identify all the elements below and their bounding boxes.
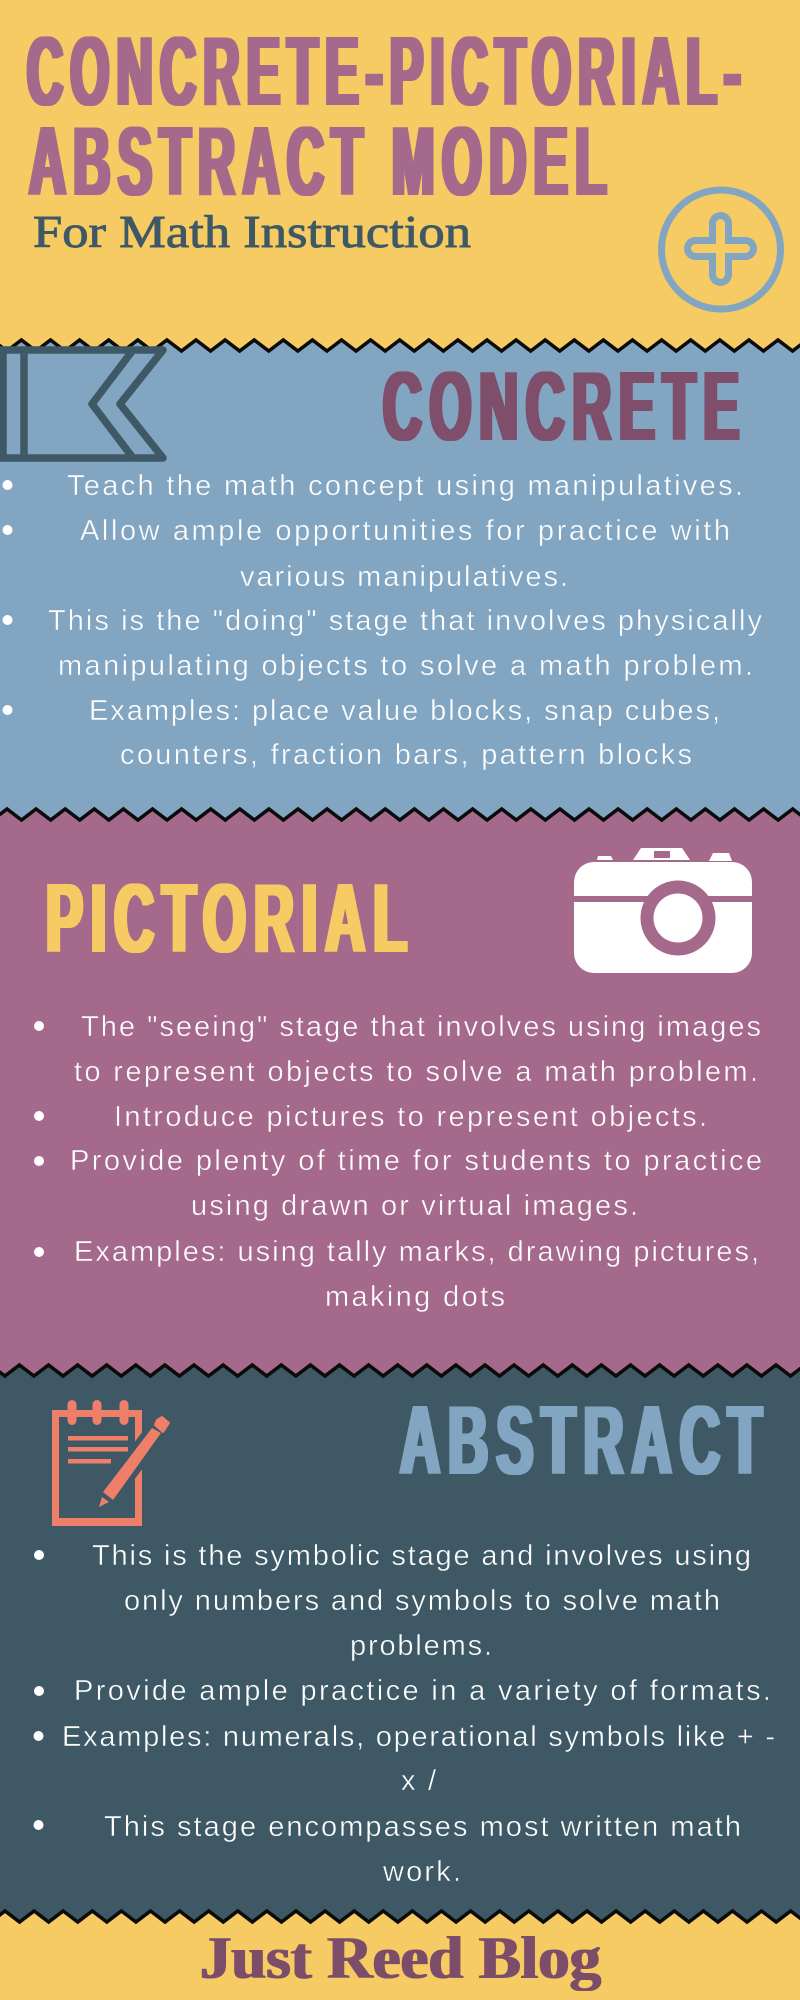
panel: abstract	[0, 1365, 800, 1930]
bullet 2: Provide ample practice in a variety of formats.	[74, 1675, 771, 1707]
bullet 4: This stage encompasses most written math	[104, 1811, 741, 1843]
subtitle: For Math Instruction	[33, 206, 471, 257]
icon: camera	[574, 848, 752, 973]
bullet 4	[2, 695, 720, 771]
bullet list: pictorial	[34, 1011, 762, 1313]
bullet 1	[34, 1540, 751, 1662]
bullet 1: to represent objects to solve a math problem.	[74, 1056, 758, 1088]
bullet 3: manipulating objects to solve a math problem.	[58, 650, 753, 682]
icon: plus in circle	[662, 190, 780, 309]
panel: header	[0, 0, 800, 346]
bullet 2: Allow ample opportunities for practice with	[80, 515, 730, 547]
icon: notepad and pencil	[52, 1404, 169, 1526]
bullet 1: problems.	[350, 1630, 492, 1662]
footer text: Just Reed Blog	[200, 1925, 601, 1991]
bullet 3: using drawn or virtual images.	[191, 1190, 638, 1222]
bullet 2: Introduce pictures to represent objects.	[114, 1101, 707, 1133]
bullet 3: Examples: numerals, operational symbols like + -	[62, 1721, 775, 1753]
bullet 4	[34, 1236, 759, 1313]
heading: pictorial: PICTORIAL	[46, 863, 415, 973]
icon: flag bookmark	[0, 350, 163, 458]
bullet 4: Examples: using tally marks, drawing pictures,	[74, 1236, 759, 1268]
bullet 4: work.	[382, 1856, 461, 1888]
bullet 3: x /	[401, 1765, 437, 1797]
bullet 4: making dots	[325, 1281, 505, 1313]
panel: concrete	[0, 340, 800, 830]
title	[27, 16, 748, 216]
bullet 1: Teach the math concept using manipulatives.	[67, 470, 743, 502]
panel: footer	[0, 1911, 800, 2000]
bullet 4	[34, 1811, 741, 1888]
bullet 2: various manipulatives.	[240, 561, 568, 593]
bullet 1: This is the symbolic stage and involves using	[92, 1540, 751, 1572]
bullet 4: counters, fraction bars, pattern blocks	[120, 739, 692, 771]
bullet 4: Examples: place value blocks, snap cubes,	[89, 695, 720, 727]
bullet 1: The "seeing" stage that involves using images	[81, 1011, 761, 1043]
bullet 3: Provide plenty of time for students to practice	[70, 1145, 762, 1177]
bullet 3: This is the "doing" stage that involves physically	[48, 605, 762, 637]
bullet 2	[2, 515, 730, 593]
bullet list: concrete	[2, 470, 762, 771]
bullet 3	[2, 605, 762, 682]
panel: pictorial	[0, 809, 800, 1385]
bullet list: abstract	[34, 1540, 775, 1888]
bullet 1	[34, 1011, 761, 1088]
bullet 3	[34, 1721, 775, 1797]
bullet 3	[34, 1145, 762, 1222]
bullet 1: only numbers and symbols to solve math	[124, 1585, 720, 1617]
